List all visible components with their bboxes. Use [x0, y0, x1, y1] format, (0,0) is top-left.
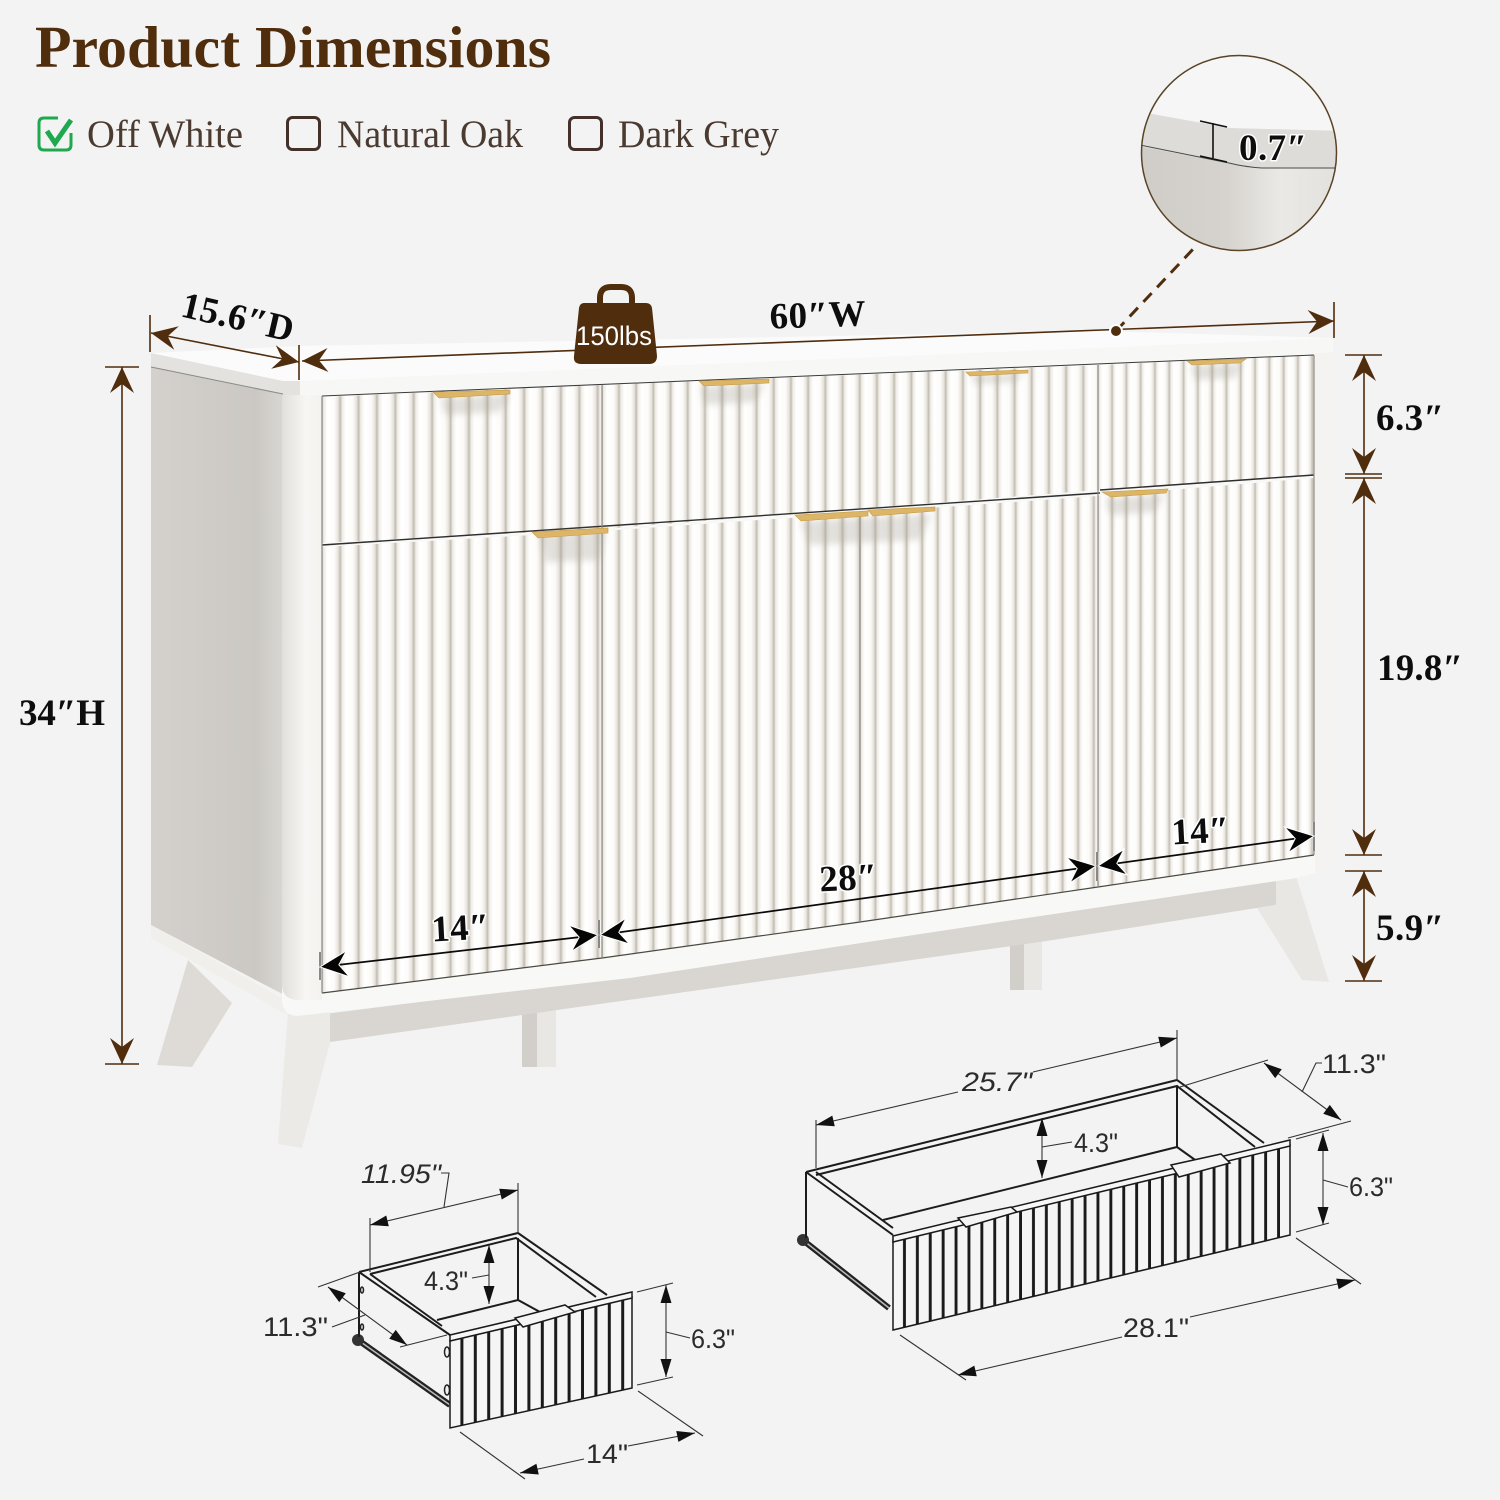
label 4.3: 4.3" — [1074, 1128, 1118, 1158]
drawer 1 — [322, 385, 602, 543]
drawer handle right — [1171, 1154, 1230, 1177]
front frame — [282, 352, 1333, 1016]
label 28.1 — [900, 1238, 1361, 1380]
drawer box outline — [359, 1233, 607, 1337]
label 14: 14" — [586, 1439, 628, 1469]
colour options — [39, 113, 779, 156]
top edge side strip — [151, 353, 300, 395]
drawer 2 — [602, 365, 1098, 529]
drawer handle left — [958, 1207, 1017, 1227]
drawer front top rim — [450, 1292, 632, 1341]
door 2 — [602, 513, 860, 958]
dimension: door width centre 28 — [600, 857, 1096, 935]
label 4.3 — [1042, 1118, 1118, 1178]
door 1 — [322, 531, 602, 993]
label 6.3: 6.3" — [691, 1324, 735, 1354]
label 25.7: 25.7" — [961, 1067, 1034, 1097]
option: dark grey: Dark Grey — [618, 113, 779, 156]
side hardware holes — [360, 1287, 450, 1395]
dimension: door width left 14 — [320, 822, 1314, 980]
drawer fluted front — [893, 1145, 1290, 1330]
back leg centre — [522, 1010, 556, 1067]
label 6.3 — [637, 1283, 735, 1385]
dimension: door width left 14: 14″ — [430, 907, 490, 951]
icon: weight 150lbs: 150lbs — [576, 321, 652, 351]
door 4 — [1098, 478, 1314, 887]
dimension: door height 19.8 — [1345, 478, 1463, 855]
side base strip — [151, 925, 322, 1016]
apron rail — [325, 878, 1276, 1042]
dimension: door height 19.8: 19.8″ — [1377, 648, 1463, 689]
marble top surface — [151, 331, 1333, 395]
label 6.3: 6.3" — [1349, 1172, 1393, 1202]
dimension: door width centre 28: 28″ — [818, 857, 878, 901]
magnifier circle — [1140, 54, 1338, 252]
label 11.95 — [361, 1159, 518, 1272]
right frame column — [1315, 352, 1333, 873]
drawer rail — [797, 1234, 889, 1308]
label 11.3: 11.3" — [263, 1312, 328, 1342]
back leg left — [157, 960, 232, 1067]
option: natural oak: Natural Oak — [337, 113, 523, 156]
sideboard cabinet — [151, 331, 1333, 1148]
back leg right-centre — [1010, 940, 1042, 990]
drawer box outline — [806, 1080, 1264, 1238]
panel seams — [322, 355, 1314, 993]
top marble front edge — [300, 338, 1333, 395]
dimension: height 34 — [19, 367, 139, 1064]
dimension: height 34: 34″H — [19, 693, 105, 734]
icon: weight 150lbs — [574, 287, 657, 364]
front right leg — [1257, 876, 1329, 982]
rounded corner column — [282, 395, 322, 1000]
handle shadows — [440, 363, 1242, 562]
drawer front top rim — [893, 1140, 1290, 1242]
dimension: door width right 14: 14″ — [1170, 810, 1230, 854]
large drawer diagram — [797, 1030, 1393, 1380]
label 6.3 — [1296, 1130, 1393, 1232]
callout: top thickness detail — [1110, 55, 1345, 337]
option: off white (checked): Off White — [87, 113, 243, 156]
dimension: leg height 5.9: 5.9″ — [1376, 908, 1444, 949]
dimension: depth 15.6 — [150, 285, 299, 380]
title: Product Dimensions — [35, 14, 551, 80]
dimension: door width right 14 — [1098, 810, 1314, 866]
label 11.3 — [263, 1272, 447, 1347]
leader dashed line — [1110, 246, 1196, 337]
drawer handle — [515, 1305, 575, 1327]
label 4.3: 4.3" — [424, 1266, 468, 1296]
door 3 — [860, 496, 1098, 922]
dimension: depth 15.6: 15.6″D — [177, 285, 298, 351]
top edge shadow line — [151, 367, 283, 394]
label 11.3 — [1180, 1049, 1386, 1138]
label 11.95: 11.95" — [361, 1159, 442, 1189]
label 28.1: 28.1" — [1123, 1313, 1189, 1343]
gold handles — [433, 359, 1246, 538]
front left leg — [278, 1012, 330, 1148]
label 14 — [460, 1391, 703, 1479]
dimension: width 60 — [302, 293, 1334, 361]
drawer rail — [352, 1334, 450, 1405]
label 25.7 — [816, 1030, 1177, 1168]
dimension: drawer height 6.3 — [1345, 355, 1444, 474]
dimension: width 60: 60″W — [769, 293, 866, 338]
magnifier circle: 0.7″ — [1239, 128, 1307, 169]
drawer fluted front — [450, 1297, 632, 1428]
label 11.3: 11.3" — [1322, 1049, 1386, 1079]
label 4.3 — [424, 1245, 489, 1304]
dimension: leg height 5.9 — [1345, 871, 1444, 981]
small drawer diagram — [263, 1159, 735, 1479]
drawer 3 — [1098, 355, 1314, 490]
side panel — [151, 366, 290, 998]
dimension: drawer height 6.3: 6.3″ — [1376, 398, 1444, 439]
